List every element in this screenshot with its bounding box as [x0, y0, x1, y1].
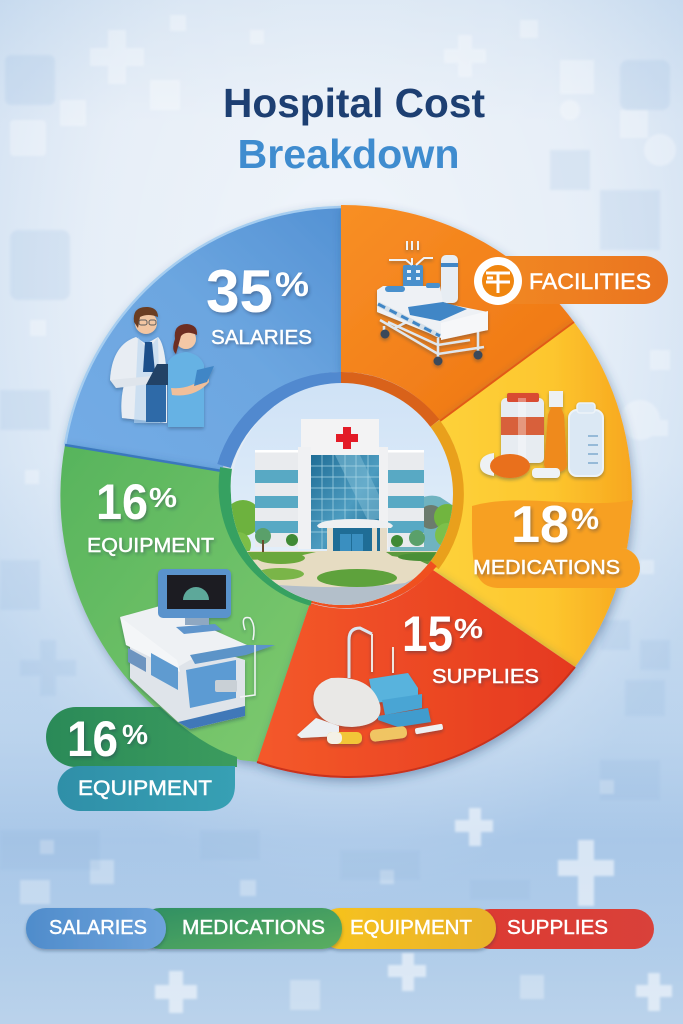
label: salaries 35% [206, 258, 312, 349]
label: supplies 15%: SUPPLIES [432, 666, 539, 688]
building [301, 419, 379, 455]
icon: medical supplies [297, 628, 443, 744]
title: Hospital Cost [223, 80, 485, 126]
doctor [110, 307, 180, 423]
label: medications 18% [473, 496, 620, 579]
title [223, 80, 485, 177]
legend bar [26, 908, 654, 949]
grounds [246, 551, 438, 605]
donut chart [60, 205, 640, 777]
segment: salaries 35% [65, 207, 341, 471]
medications label patch [472, 500, 640, 588]
callout: equipment 16%: 16 [67, 711, 118, 767]
callout: equipment 16%: EQUIPMENT [78, 777, 212, 800]
legend: supplies: SUPPLIES [507, 917, 608, 939]
label: equipment 16% in chart: % [149, 482, 177, 513]
label: salaries 35%: 35 [206, 258, 273, 325]
callout: facilities: FACILITIES [529, 269, 651, 294]
legend: salaries [26, 908, 166, 949]
icon: ultrasound machine [120, 569, 275, 729]
center hospital illustration [225, 380, 460, 612]
legend: equipment: EQUIPMENT [350, 917, 472, 939]
label: equipment 16% in chart [87, 474, 214, 557]
segment: medications 18% [433, 322, 632, 667]
icon: medication bottles [480, 391, 603, 478]
segment: facilities [341, 205, 574, 421]
callout: facilities [474, 256, 668, 305]
label: medications 18%: % [571, 503, 599, 536]
nurse [168, 324, 214, 427]
label: equipment 16% in chart: 16 [96, 474, 148, 530]
legend: salaries: SALARIES [49, 917, 147, 939]
legend: medications: MEDICATIONS [182, 917, 325, 939]
legend: equipment [320, 908, 496, 949]
icon: doctor and nurse [110, 307, 214, 427]
label: supplies 15%: 15 [402, 606, 453, 662]
callout: equipment 16% [46, 707, 237, 811]
segment: supplies 15% [257, 570, 575, 777]
segment: equipment 16% [60, 445, 310, 762]
label: salaries 35%: SALARIES [211, 327, 312, 349]
trees [232, 500, 255, 536]
legend: medications [140, 908, 342, 949]
label: supplies 15% [402, 606, 539, 688]
label: medications 18%: MEDICATIONS [473, 557, 620, 579]
label: salaries 35%: % [275, 266, 309, 304]
icon: facilities badge [474, 257, 522, 305]
label: medications 18%: 18 [511, 496, 569, 554]
title: Breakdown [238, 131, 460, 177]
legend: supplies [470, 909, 654, 949]
label: supplies 15%: % [454, 613, 483, 644]
entrance [333, 528, 380, 551]
inner ring [224, 379, 457, 603]
label: equipment 16% in chart: EQUIPMENT [87, 535, 214, 557]
red cross [336, 427, 358, 449]
callout: equipment 16%: % [122, 719, 148, 750]
icon: hospital bed [377, 241, 488, 366]
